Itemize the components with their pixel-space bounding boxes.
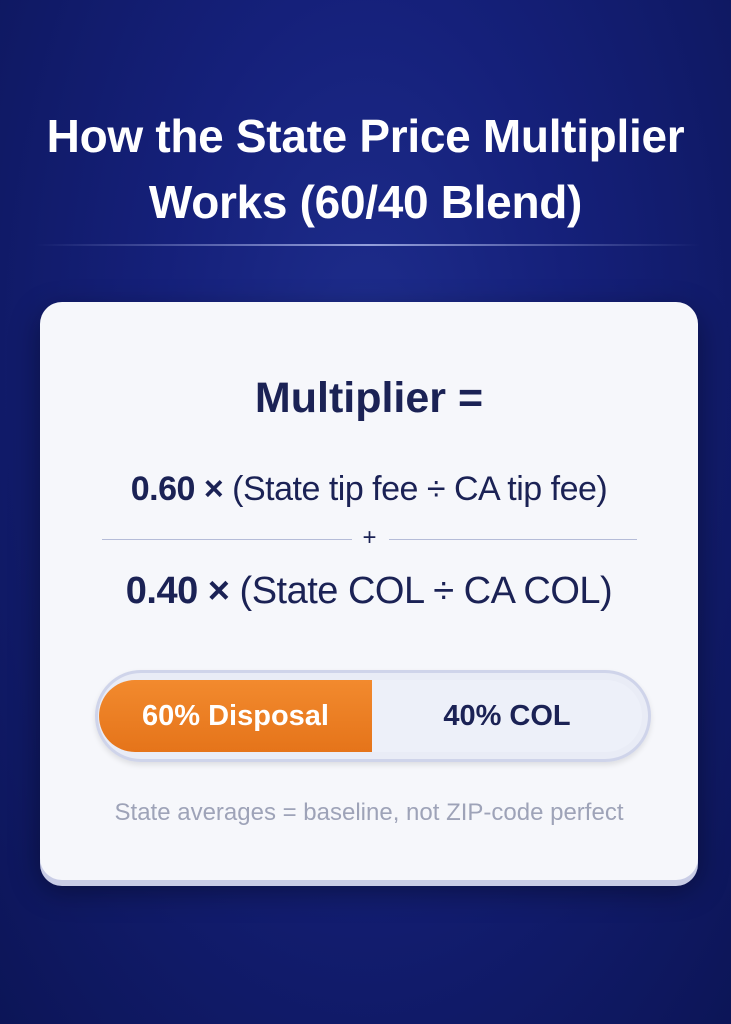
bar segment: 40% COL: 40% COL: [443, 700, 571, 732]
footnote: State averages = baseline, not ZIP-code perfect: [115, 799, 623, 826]
formula line 1: 0.60 × (State tip fee ÷ CA tip fee): [131, 470, 607, 508]
formula line 2: 0.40 × (State COL ÷ CA COL): [126, 570, 612, 612]
plus divider: +: [362, 524, 376, 551]
title: [47, 110, 684, 228]
bar segment: 60% Disposal: [99, 680, 372, 752]
title: Works (60/40 Blend): [149, 176, 582, 228]
bar segment: 60% Disposal: 60% Disposal: [142, 700, 329, 732]
title: How the State Price Multiplier: [47, 110, 684, 162]
bar segment: 40% COL: [372, 680, 642, 752]
heading: Multiplier =: Multiplier =: [255, 374, 483, 422]
bar: 60/40 split: [95, 670, 651, 762]
panel: formula card: [40, 302, 698, 880]
